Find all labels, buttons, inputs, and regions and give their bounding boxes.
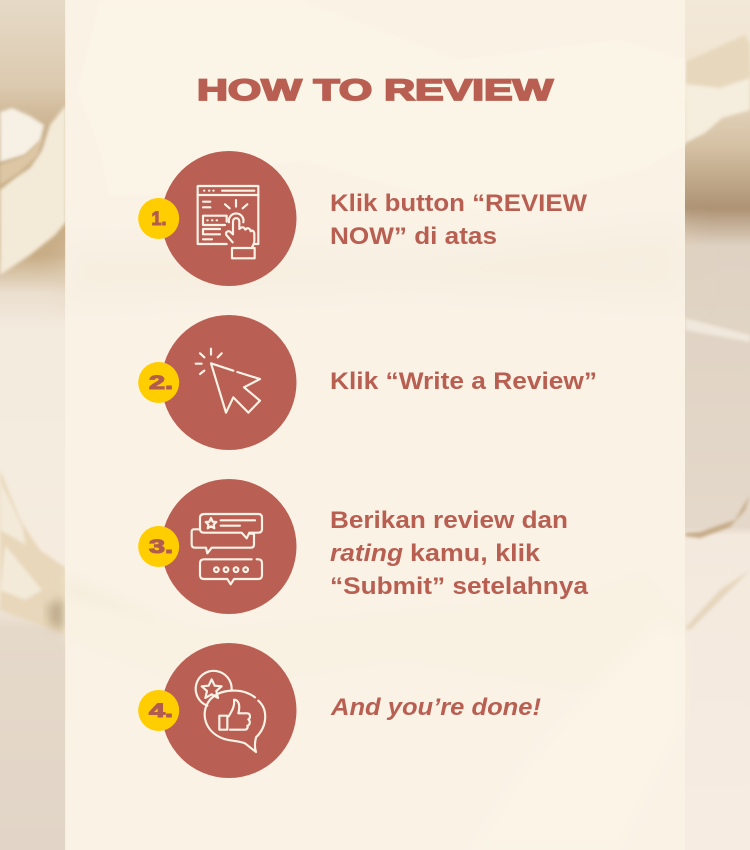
step 2 — [138, 315, 296, 450]
icon: chat bubbles with star rating — [192, 514, 262, 584]
step 1 text: NOW” di atas — [330, 223, 497, 250]
step 2 number badge: 2. — [149, 373, 173, 394]
step 4 number badge: 4. — [149, 701, 173, 722]
step 1 number badge: 1. — [152, 209, 166, 230]
step 2 circle — [162, 315, 296, 450]
step 3 number badge: 3. — [149, 537, 173, 558]
icon: browser window with clicking hand — [198, 186, 258, 258]
step 4 text: And you’re done! — [330, 694, 541, 721]
step 3 text — [330, 507, 589, 600]
step 1 text — [330, 190, 587, 250]
step 3 text: kamu, klik — [410, 540, 541, 567]
step 1 — [138, 151, 296, 286]
icon: star and thumbs-up speech bubbles — [196, 671, 265, 752]
step 1 text: Klik button “REVIEW — [330, 190, 587, 217]
step 3 — [138, 479, 296, 614]
step 3 text: Berikan review dan — [330, 507, 568, 534]
title: HOW TO REVIEW — [197, 74, 554, 107]
step 3 text: “Submit” setelahnya — [330, 573, 589, 600]
step 3 text: rating — [330, 540, 403, 567]
icon: mouse cursor — [196, 349, 260, 413]
step 4 circle — [162, 643, 296, 778]
step 1 number badge — [138, 198, 179, 239]
step 4 — [138, 643, 296, 778]
step 2 number badge — [138, 362, 179, 403]
step 2 text: Klik “Write a Review” — [330, 368, 597, 395]
step 3 number badge — [138, 526, 179, 567]
step 4 number badge — [138, 690, 179, 731]
step 3 circle — [162, 479, 296, 614]
step 1 circle — [162, 151, 296, 286]
